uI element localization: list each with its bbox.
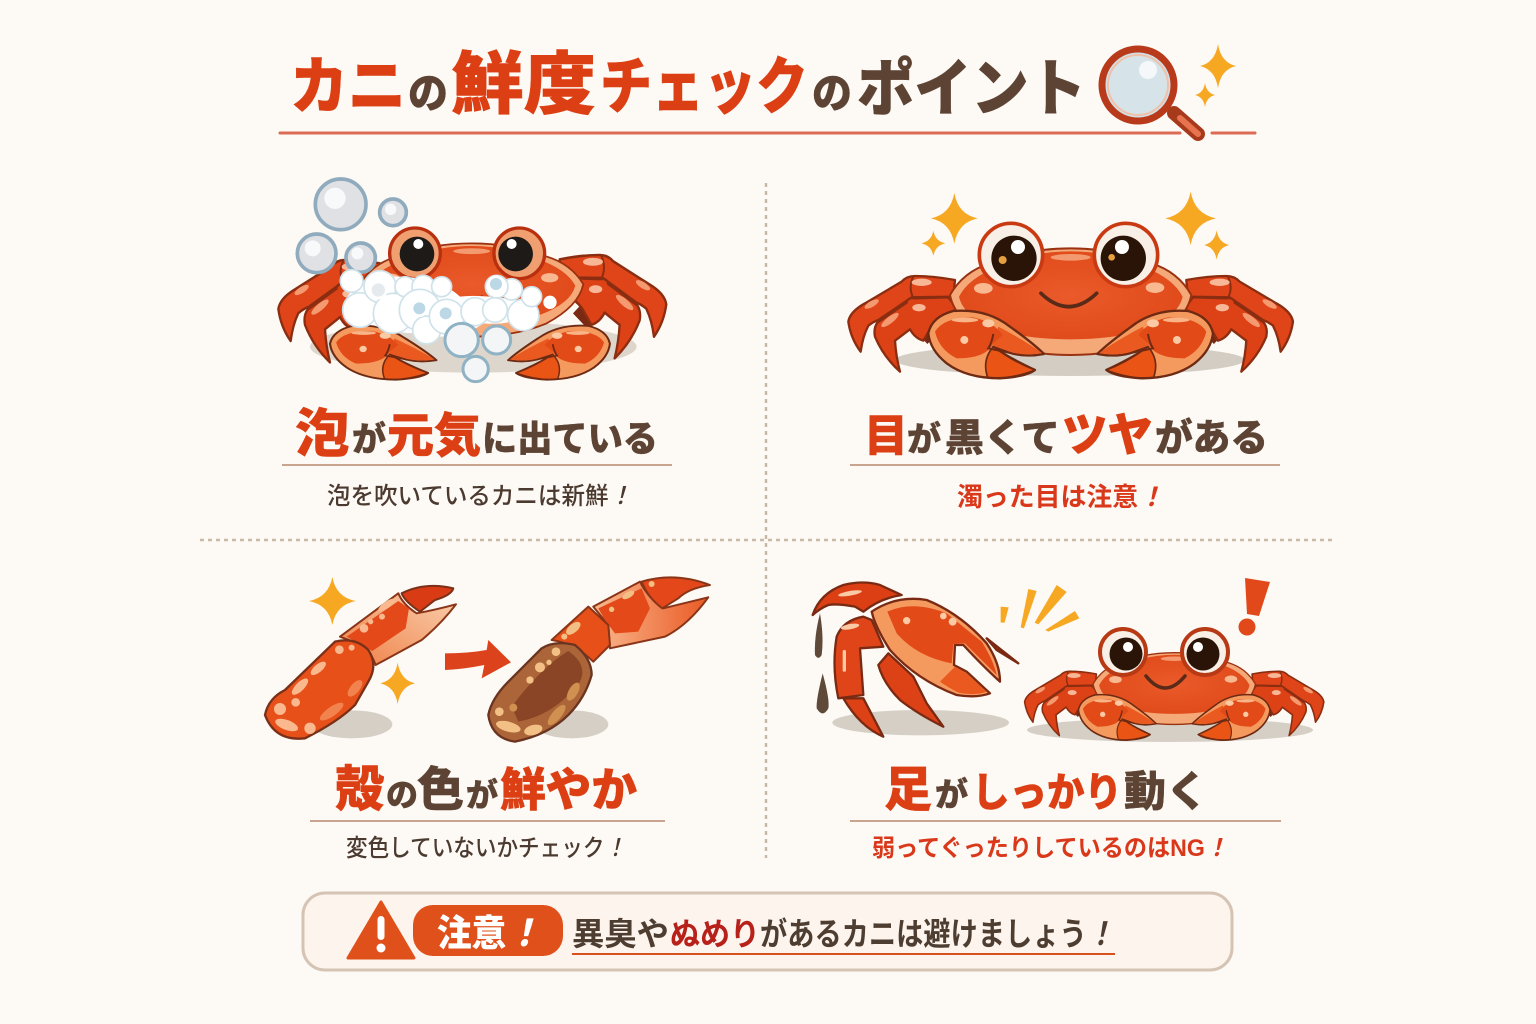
heading: が [466,777,498,813]
callout: warning banner [303,893,1232,970]
warning text: 異臭や [572,916,669,952]
heading: 黒くて [945,418,1060,460]
heading rule [850,464,1280,466]
warning underline [572,953,1115,955]
panel: shell colour [265,577,710,862]
title: ポイント [857,55,1086,124]
heading [864,409,1268,461]
title: の [812,70,852,117]
title [290,47,1086,124]
heading: がある [1155,417,1268,460]
illustration: crab blowing bubbles [278,179,666,382]
title: カニ [290,53,406,122]
heading: ツヤ [1062,409,1153,461]
illustration: surprised small crab [1025,578,1324,742]
icon: magnifying glass with sparkles [1102,44,1236,134]
panel: eyes [848,192,1293,512]
heading: に出ている [482,418,658,459]
panel: bubbles [278,179,672,510]
heading [335,763,637,817]
heading [884,764,1208,817]
heading rule [282,464,672,466]
warning text: ぬめり [670,916,760,952]
heading: 足 [884,764,932,817]
heading: 色 [417,763,464,816]
illustration: limp crab claw with drips [813,582,1079,737]
heading: 動く [1124,768,1208,815]
title: 鮮度 [451,47,596,123]
dashed dividers [200,183,1332,858]
illustration: fresh and discoloured crab legs [265,577,710,742]
heading: が [352,420,386,459]
illustration: crab with shiny eyes [848,192,1293,378]
warning text: があるカニは避けましょう！ [760,916,1114,952]
heading [295,406,658,464]
heading: 鮮やか [500,764,637,816]
heading: の [386,777,418,813]
heading rule [850,820,1281,822]
badge: caution [413,905,563,956]
heading: 殻 [335,763,384,817]
heading rule [310,820,665,822]
caption: 弱ってぐったりしているのはNG！ [872,835,1228,862]
panel: leg movement [813,578,1324,862]
warning text [572,916,1114,952]
heading: 目 [864,412,908,461]
caption: 変色していないかチェック！ [346,835,626,862]
heading: しっかり [972,771,1122,815]
badge: caution: 注意！ [437,913,541,954]
heading: が [907,420,941,459]
caption: 濁った目は注意！ [957,482,1164,512]
caption: 泡を吹いているカニは新鮮！ [327,483,632,510]
heading: が [935,776,968,813]
title: チェック [600,53,808,122]
heading: 元気 [387,409,481,462]
title underline [280,132,1255,134]
icon: warning triangle [348,902,414,958]
title: の [408,70,448,117]
heading: 泡 [295,406,350,464]
